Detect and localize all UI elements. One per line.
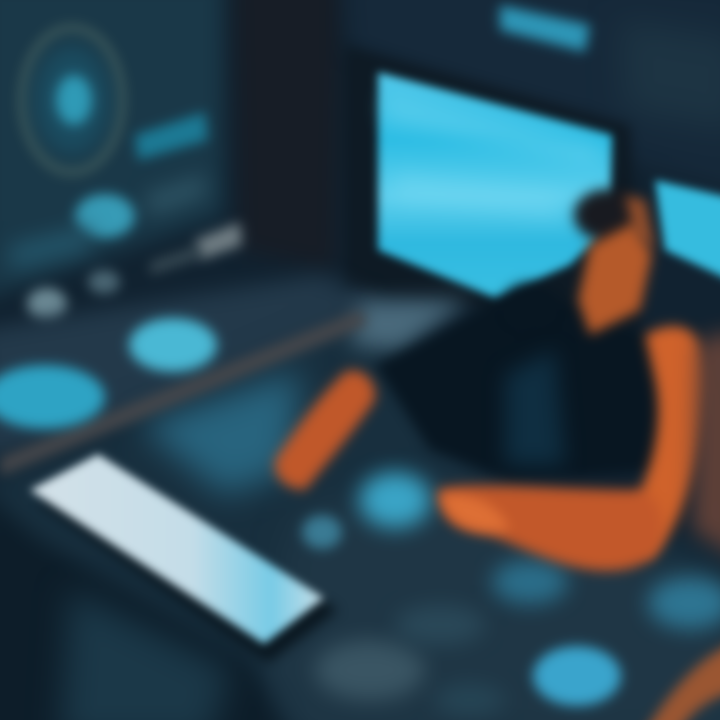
chair arm bottom right <box>640 640 720 720</box>
panel: left wall display <box>0 0 340 320</box>
panel: right monitor <box>655 180 720 285</box>
forearm: lower <box>438 486 662 571</box>
front dark edge <box>0 490 290 720</box>
figure: person <box>275 189 720 720</box>
panel: central monitor <box>345 45 640 330</box>
hair <box>574 189 642 241</box>
panel: top right wall <box>345 0 720 190</box>
head <box>578 222 652 335</box>
tablet: bright white card <box>30 454 338 663</box>
forearm: upper left <box>275 370 375 490</box>
back arm: orange sleeve <box>610 326 706 560</box>
icon: circular gauge <box>22 28 122 172</box>
readout bars <box>10 112 242 275</box>
torso: dark shirt <box>375 300 665 480</box>
desk edge highlight <box>0 310 368 476</box>
keyboard: glowing keys <box>250 472 720 720</box>
small buttons <box>27 270 120 320</box>
icon: glowing desk pads <box>0 318 217 429</box>
dark vertical pillar <box>235 0 340 270</box>
panel: desk surface <box>0 275 720 720</box>
